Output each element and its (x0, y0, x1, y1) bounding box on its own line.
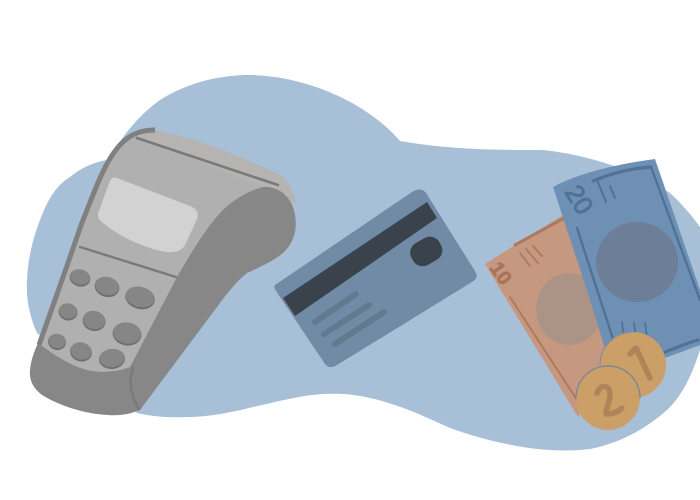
terminal side and base (30, 187, 296, 415)
terminal screen (98, 178, 198, 252)
banknote: 10 (485, 215, 625, 417)
terminal outer rim (39, 130, 155, 345)
payment terminal (30, 129, 296, 415)
card magnetic stripe (283, 202, 437, 316)
note printed lines (510, 217, 577, 400)
coin disc (600, 332, 666, 398)
card chip (406, 233, 446, 270)
note circle (536, 273, 602, 345)
coin: 1 (600, 332, 666, 398)
note printed lines (577, 167, 700, 352)
note label: 10 (485, 258, 516, 289)
terminal top band (137, 129, 296, 204)
coin: 2 (576, 366, 640, 430)
note circle (596, 222, 678, 302)
coin edge (600, 332, 633, 365)
card signature lines (315, 294, 384, 344)
note body (485, 215, 625, 417)
credit card (274, 189, 477, 367)
coin numeral (597, 386, 622, 414)
card body (274, 189, 477, 367)
coin numeral (630, 348, 650, 378)
terminal seam lines (80, 138, 278, 409)
coin edge (576, 366, 640, 398)
coin disc (576, 366, 640, 430)
background blob (27, 75, 700, 450)
terminal face (40, 136, 263, 371)
banknote: 20 (553, 159, 700, 365)
note body (553, 159, 700, 365)
note label: 20 (559, 179, 600, 220)
terminal keypad (46, 267, 157, 370)
